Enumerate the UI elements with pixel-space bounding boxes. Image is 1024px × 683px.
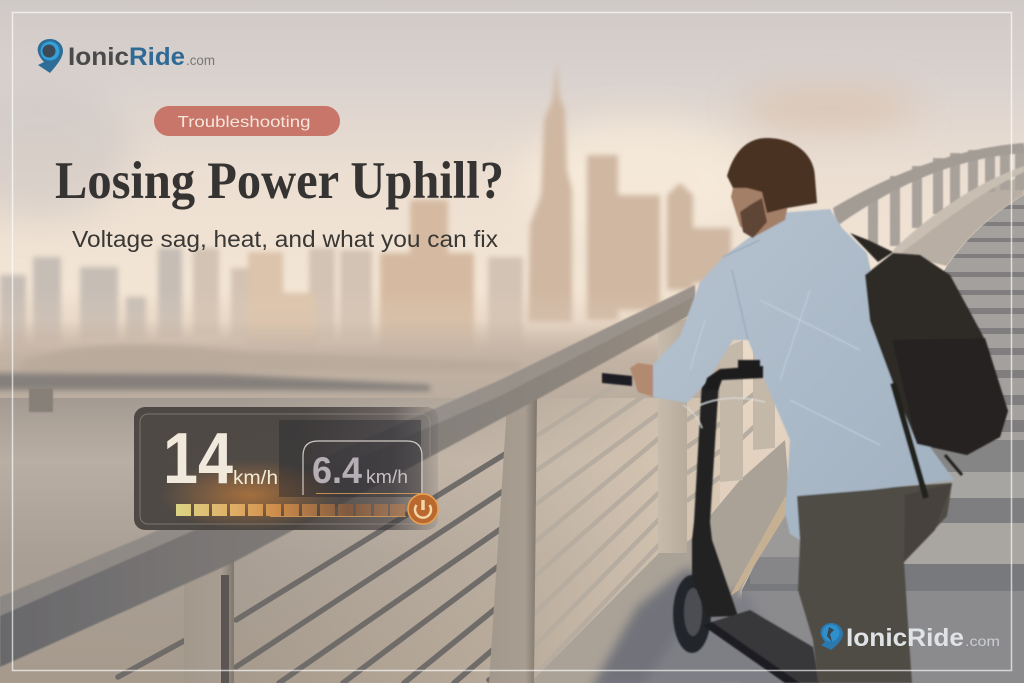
city skyline	[0, 62, 740, 370]
neck and face	[731, 180, 790, 238]
secondary speed box	[303, 441, 422, 495]
secondary speed box: km/h	[366, 467, 408, 487]
railing bars, far sections	[533, 380, 772, 673]
power icon	[408, 494, 438, 524]
distant bridge over haze	[0, 320, 720, 410]
bridge floor	[530, 440, 800, 683]
water	[0, 388, 720, 683]
top logo: Ride	[129, 43, 185, 71]
top logo	[38, 39, 215, 73]
icon: location pin	[820, 623, 843, 650]
stairs and walkway	[742, 195, 1024, 683]
bottom logo	[820, 623, 1000, 652]
railing posts	[184, 318, 775, 683]
shirt	[650, 209, 954, 540]
secondary speed box: 6.4	[312, 450, 362, 491]
subtitle: Voltage sag, heat, and what you can fix	[72, 226, 499, 252]
icon: location pin	[38, 39, 63, 73]
current speed reading: 14	[163, 419, 233, 499]
man from behind	[630, 138, 1008, 683]
speed display panel	[134, 407, 438, 530]
hand	[630, 363, 653, 397]
top logo: Ionic	[68, 43, 129, 71]
hair	[727, 138, 817, 213]
main handrail	[0, 285, 696, 667]
current speed reading	[163, 419, 278, 499]
bottom logo: .com	[965, 633, 1000, 649]
railing bars, near sections	[118, 443, 523, 683]
battery level bar	[176, 504, 405, 516]
top logo: .com	[186, 52, 215, 68]
bridge parapet	[833, 143, 1024, 266]
title: Losing Power Uphill?	[55, 152, 504, 210]
scooter lower body	[673, 380, 820, 683]
scooter handlebars	[602, 360, 763, 390]
trousers	[793, 483, 952, 683]
category pill: Troubleshooting	[178, 114, 310, 131]
curb	[730, 497, 792, 596]
bottom logo: IonicRide	[846, 624, 964, 652]
current speed reading: km/h	[233, 468, 278, 489]
backpack	[850, 233, 893, 262]
category pill	[154, 106, 340, 136]
